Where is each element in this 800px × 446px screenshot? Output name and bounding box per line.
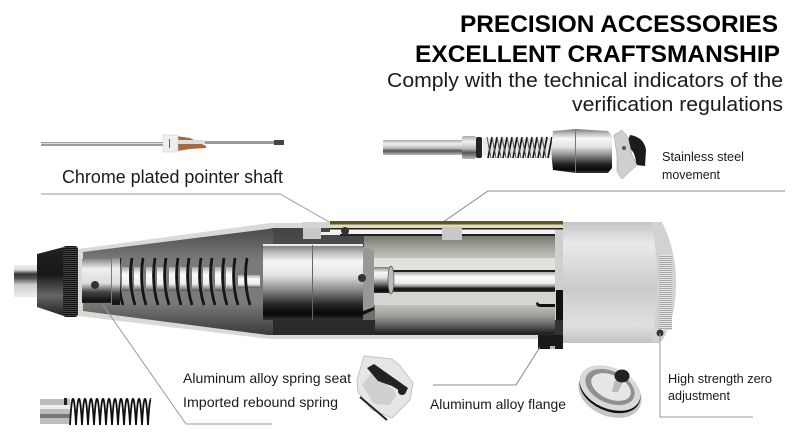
title: EXCELLENT CRAFTSMANSHIP (415, 41, 780, 68)
hammer (263, 244, 374, 320)
rebound spring (119, 258, 250, 305)
label: zero adjustment (668, 371, 772, 403)
silver cylinder (563, 222, 660, 343)
leader: movement (362, 191, 785, 278)
title (415, 11, 780, 68)
pointer shaft image (41, 135, 284, 152)
label: zero adjustment: adjustment (668, 388, 730, 403)
pointer block (442, 227, 462, 240)
cone interior (83, 228, 273, 335)
interior bands (273, 228, 555, 335)
leader: rebound spring (103, 305, 272, 424)
subtitle: Comply with the technical indicators of the (387, 69, 783, 92)
zero adjustment ring (652, 222, 676, 343)
subtitle (387, 69, 783, 116)
label: pointer shaft: Chrome plated pointer shaft (62, 167, 283, 187)
label: movement: Stainless steel (662, 149, 744, 164)
spring seat labels: Aluminum alloy spring seat (183, 370, 351, 386)
movement image (383, 129, 646, 179)
flange foot (538, 335, 563, 349)
guide rod collar (374, 267, 392, 293)
label: movement: movement (662, 167, 720, 182)
zero bracket (536, 302, 556, 307)
label: zero adjustment: High strength zero (668, 371, 772, 386)
spring seat labels: Imported rebound spring (183, 394, 338, 410)
rebound spring image (40, 398, 151, 425)
title: PRECISION ACCESSORIES (460, 11, 778, 38)
leader: pointer shaft (41, 194, 345, 231)
outer shell (78, 222, 563, 339)
spring seat image (357, 356, 413, 420)
label: flange: Aluminum alloy flange (430, 396, 566, 412)
tip (14, 265, 38, 297)
spring shaft (122, 267, 233, 291)
knurled ring (63, 246, 78, 317)
mounting collar (555, 230, 563, 335)
main instrument cutaway (14, 221, 676, 349)
leader: zero adjustment (660, 333, 753, 417)
leader: flange (433, 347, 540, 385)
callout dots (91, 227, 664, 336)
label: movement (662, 149, 744, 182)
black nose cone (37, 247, 64, 316)
subtitle: verification regulations (572, 93, 783, 116)
flange cap image (570, 356, 650, 427)
spring seat (82, 259, 111, 303)
spring seat labels (183, 370, 351, 410)
